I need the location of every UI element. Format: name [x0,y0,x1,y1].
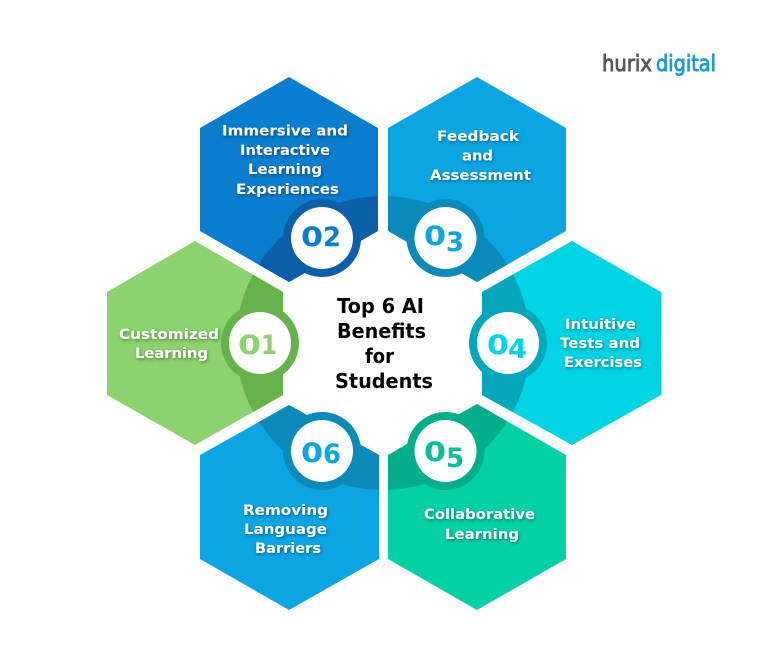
logo: hurix digital [602,52,716,77]
panel: 03 Feedback and Assessment: and [462,148,493,164]
panel: 04 Intuitive Tests and Exercises: 0 [487,330,509,361]
panel: 03 Feedback and Assessment: 0 [424,221,446,252]
panel: 06 Removing Language Barriers [200,405,379,610]
panel: 03 Feedback and Assessment: Feedback [437,129,519,145]
title: Benefits [337,319,426,343]
panel: 03 Feedback and Assessment: 3 [446,227,464,258]
panel: 04 Intuitive Tests and Exercises: Exercises [564,355,642,371]
panel: 06 Removing Language Barriers: Barriers [255,541,321,557]
title: for [365,344,394,368]
panel: 03 Feedback and Assessment: Assessment [430,168,531,184]
panel: 03 Feedback and Assessment [388,77,566,282]
panel: 01 Customized Learning [107,241,299,445]
panel: 06 Removing Language Barriers: 6 [323,439,341,470]
panel: 05 Collaborative Learning: Collaborative [424,507,535,523]
logo: hurix digital: digital [656,52,716,77]
panel: 02 Immersive and Interactive Learning Experiences [200,77,378,282]
panel: 05 Collaborative Learning [388,404,566,610]
panel: 01 Customized Learning: 1 [261,330,277,361]
title: Top 6 AI [337,294,424,318]
panel: 05 Collaborative Learning: Learning [445,527,519,543]
panel: 05 Collaborative Learning: 5 [446,443,464,474]
panel: 04 Intuitive Tests and Exercises [469,241,661,445]
logo: hurix digital: hurix [602,52,652,77]
panel: 04 Intuitive Tests and Exercises: Intuitive [565,317,636,333]
panel: 06 Removing Language Barriers: Removing [243,503,328,519]
panel: 02 Immersive and Interactive Learning Experiences: 0 [301,222,323,253]
panel: 01 Customized Learning: Learning [135,346,208,362]
panel: 02 Immersive and Interactive Learning Experiences: 2 [323,222,341,253]
panel: 02 Immersive and Interactive Learning Experiences: Immersive and [222,124,348,140]
panel: 06 Removing Language Barriers: 0 [301,438,323,469]
panel: 06 Removing Language Barriers: Language [244,522,327,538]
panel: 01 Customized Learning: Customized [119,327,219,343]
panel: 04 Intuitive Tests and Exercises: 4 [508,334,527,365]
panel: 02 Immersive and Interactive Learning Experiences: Experiences [236,182,339,198]
title [335,294,433,393]
panel: 04 Intuitive Tests and Exercises: Tests and [560,336,640,352]
panel: 05 Collaborative Learning: 0 [424,437,446,468]
panel: 02 Immersive and Interactive Learning Experiences: Interactive [240,143,330,159]
panel: 01 Customized Learning: 0 [238,330,261,361]
title: Students [335,369,433,393]
panel: 02 Immersive and Interactive Learning Experiences: Learning [248,162,322,178]
